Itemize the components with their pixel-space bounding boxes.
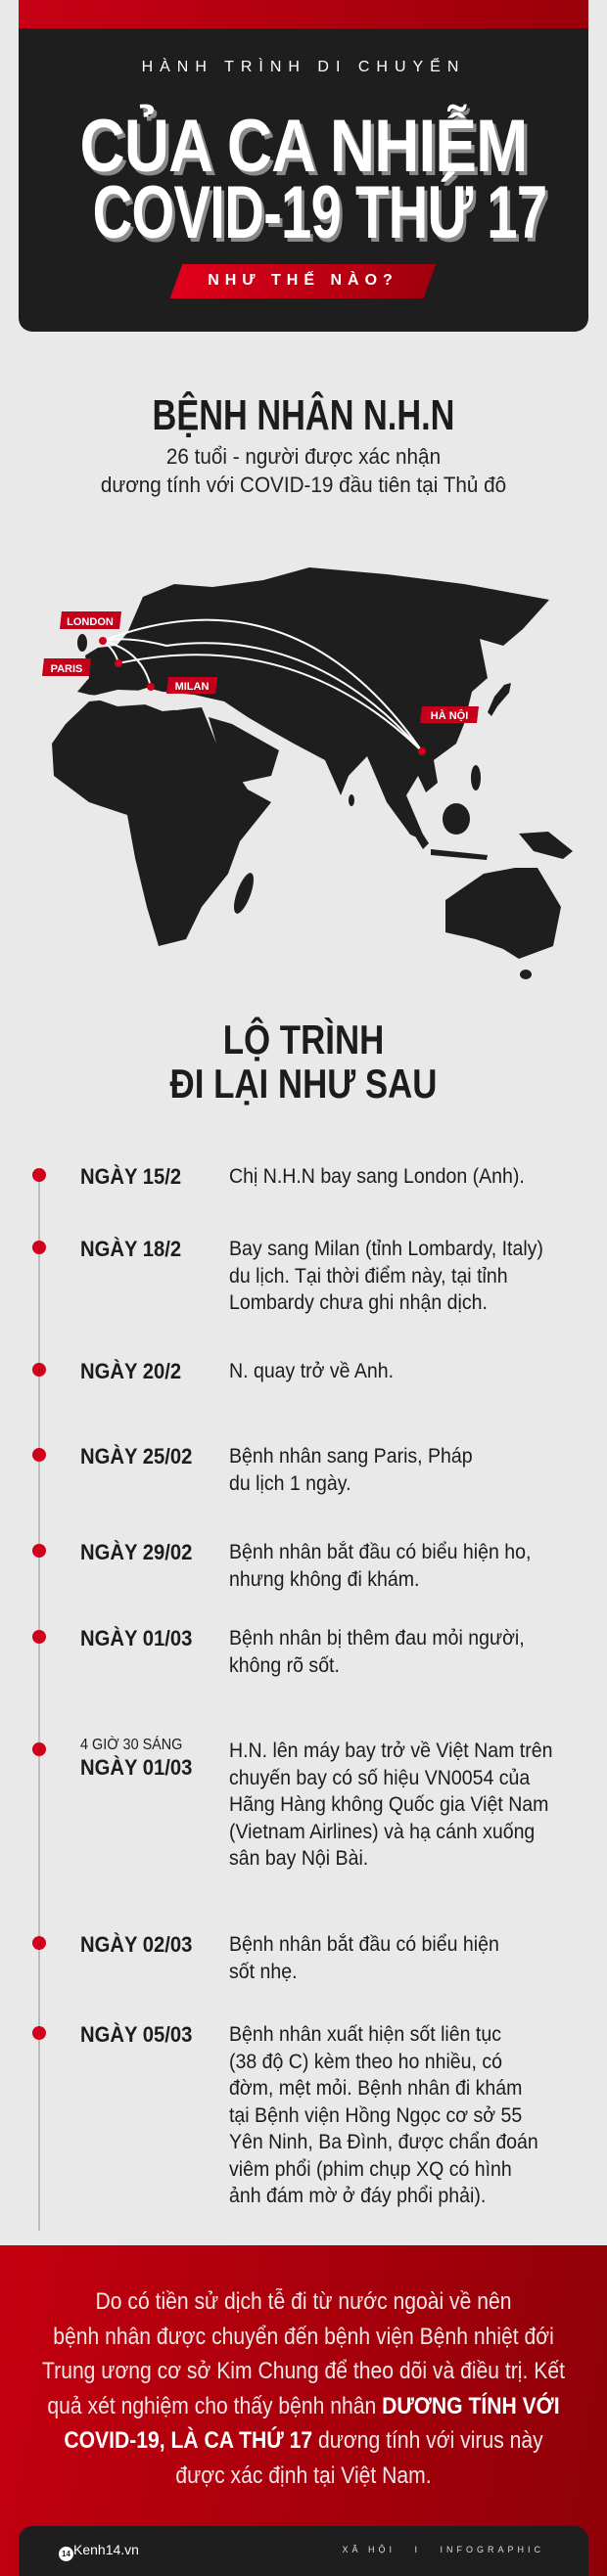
item 29/02 — [32, 1540, 531, 1591]
timeline — [38, 1182, 40, 2231]
item 05/03 — [32, 2022, 538, 2207]
item 25/02 — [32, 1444, 473, 1495]
item 05/03: ảnh đám mờ ở đáy phổi phải). — [229, 2185, 486, 2207]
main title — [80, 104, 548, 254]
item 01/03 — [32, 1626, 525, 1677]
item 02/03: sốt nhẹ. — [229, 1961, 298, 1982]
item 05/03: Yên Ninh, Ba Đình, được chẩn đoán — [229, 2131, 538, 2153]
item 15/2 — [32, 1164, 525, 1189]
header panel — [19, 0, 588, 332]
conclusion panel — [0, 2245, 607, 2576]
item 15/2: NGÀY 15/2 — [80, 1164, 181, 1189]
label: London — [60, 611, 121, 629]
main title: CỦA CA NHIỄM — [80, 105, 527, 188]
red tag — [170, 264, 437, 298]
item 05/03: (38 độ C) kèm theo ho nhiều, có — [229, 2051, 502, 2072]
kicker: HÀNH TRÌNH DI CHUYỂN — [142, 59, 465, 75]
conclusion text: Do có tiền sử dịch tễ đi từ nước ngoài về nên — [96, 2288, 511, 2315]
item 4h30 01/03: Hãng Hàng không Quốc gia Việt Nam — [229, 1793, 548, 1816]
label: Paris: PARIS — [51, 663, 82, 675]
city dots — [99, 637, 426, 755]
conclusion text: bệnh nhân được chuyển đến bệnh viện Bệnh nhiệt đới — [53, 2323, 554, 2350]
logo — [59, 2542, 139, 2561]
item 4h30 01/03: NGÀY 01/03 — [80, 1755, 192, 1780]
item 4h30 01/03 — [32, 1736, 552, 1870]
item 20/2: NGÀY 20/2 — [80, 1359, 181, 1383]
item 02/03 — [32, 1932, 499, 1982]
item 05/03: NGÀY 05/03 — [80, 2022, 192, 2047]
conclusion text — [42, 2288, 565, 2489]
label: Milan — [166, 677, 217, 694]
section label: XÃ HỘI I INFOGRAPHIC — [342, 2545, 544, 2554]
patient subtitle: dương tính với COVID-19 đầu tiên tại Thủ đô — [101, 473, 506, 497]
conclusion text: COVID-19, LÀ CA THỨ 17 dương tính với virus này — [64, 2427, 543, 2454]
item 18/2: Bay sang Milan (tỉnh Lombardy, Italy) — [229, 1238, 543, 1260]
item 05/03: viêm phổi (phim chụp XQ có hình — [229, 2158, 512, 2180]
item 20/2 — [32, 1359, 394, 1383]
item 18/2 — [32, 1237, 543, 1314]
item 4h30 01/03: 4 GIỜ 30 SÁNG — [80, 1737, 182, 1753]
item 18/2: NGÀY 18/2 — [80, 1237, 181, 1261]
flight arcs — [103, 620, 422, 751]
route heading: ĐI LẠI NHƯ SAU — [170, 1061, 437, 1107]
item 25/02: NGÀY 25/02 — [80, 1444, 192, 1469]
item 18/2: du lịch. Tại thời điểm này, tại tỉnh — [229, 1264, 508, 1288]
item 20/2: N. quay trở về Anh. — [229, 1360, 394, 1382]
patient subtitle — [101, 444, 506, 497]
red tag: NHƯ THẾ NÀO? — [208, 272, 398, 289]
item 05/03: tại Bệnh viện Hồng Ngọc cơ sở 55 — [229, 2103, 522, 2127]
label: Paris — [42, 658, 91, 676]
item 05/03: Bệnh nhân xuất hiện sốt liên tục — [229, 2023, 501, 2046]
red top bar — [19, 0, 588, 28]
item 01/03: NGÀY 01/03 — [80, 1626, 192, 1650]
item 29/02: nhưng không đi khám. — [229, 1567, 419, 1591]
conclusion text: được xác định tại Việt Nam. — [175, 2462, 432, 2489]
item 02/03: NGÀY 02/03 — [80, 1932, 192, 1957]
item 29/02: NGÀY 29/02 — [80, 1540, 192, 1564]
mediterranean — [89, 690, 206, 710]
item 05/03: đờm, mệt mỏi. Bệnh nhân đi khám — [229, 2077, 522, 2100]
conclusion text: quả xét nghiệm cho thấy bệnh nhân DƯƠNG TÍNH VỚI — [47, 2393, 560, 2418]
logo: 14 — [62, 2550, 70, 2558]
label: Ha Noi — [420, 706, 479, 723]
item 4h30 01/03: sân bay Nội Bài. — [229, 1847, 368, 1870]
label: Milan: MILAN — [175, 681, 209, 693]
item 29/02: Bệnh nhân bắt đầu có biểu hiện ho, — [229, 1541, 531, 1563]
logo: Kenh14.vn — [73, 2542, 139, 2557]
item 18/2: Lombardy chưa ghi nhận dịch. — [229, 1291, 488, 1314]
patient heading: BỆNH NHÂN N.H.N — [153, 391, 454, 439]
footer bar — [19, 2526, 588, 2576]
item 25/02: du lịch 1 ngày. — [229, 1471, 351, 1495]
item 25/02: Bệnh nhân sang Paris, Pháp — [229, 1445, 473, 1468]
route heading — [170, 1017, 437, 1107]
item 01/03: không rõ sốt. — [229, 1653, 340, 1677]
world map — [42, 567, 573, 979]
route heading: LỘ TRÌNH — [223, 1017, 384, 1062]
item 02/03: Bệnh nhân bắt đầu có biểu hiện — [229, 1933, 499, 1956]
item 4h30 01/03: chuyến bay có số hiệu VN0054 của — [229, 1767, 530, 1788]
label: Ha Noi: HÀ NỘI — [431, 709, 468, 722]
item 4h30 01/03: H.N. lên máy bay trở về Việt Nam trên — [229, 1740, 552, 1762]
label: London: LONDON — [67, 616, 114, 628]
item 15/2: Chị N.H.N bay sang London (Anh). — [229, 1165, 525, 1188]
conclusion text: Trung ương cơ sở Kim Chung để theo dõi và điều trị. Kết — [42, 2358, 565, 2384]
patient subtitle: 26 tuổi - người được xác nhận — [166, 444, 441, 469]
item 4h30 01/03: (Vietnam Airlines) và hạ cánh xuống — [229, 1820, 535, 1843]
item 01/03: Bệnh nhân bị thêm đau mỏi người, — [229, 1627, 525, 1650]
main title: COVID-19 THỨ 17 — [93, 171, 546, 254]
